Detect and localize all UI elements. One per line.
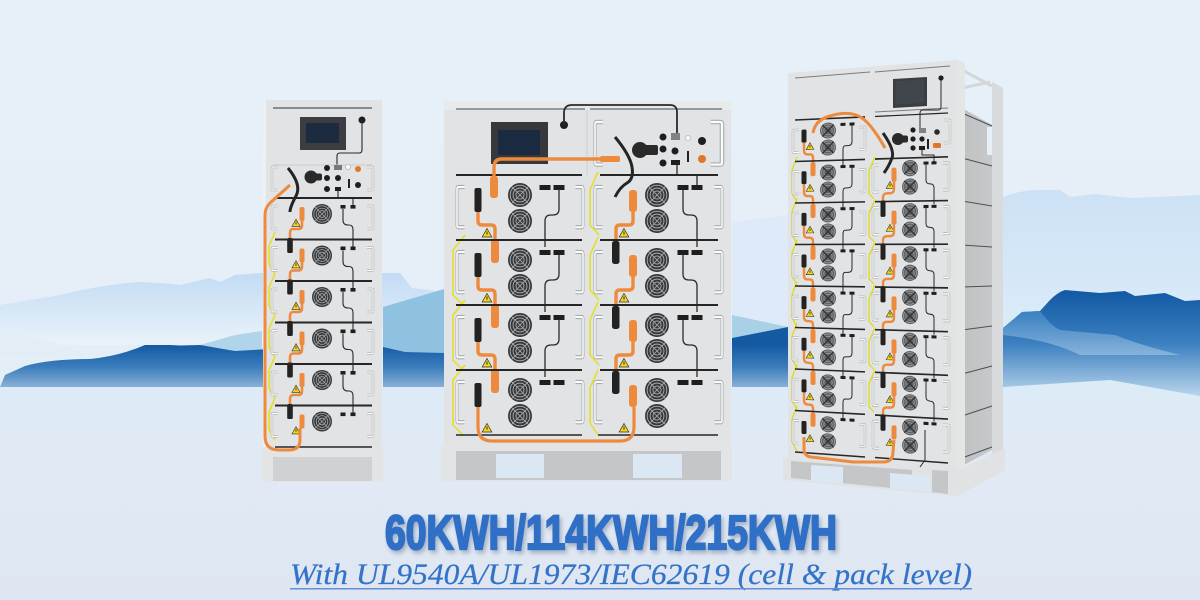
rack B battery modules, right column <box>590 172 722 435</box>
rack C side panels <box>957 60 1003 490</box>
subtitle with certifications: With UL9540A/UL1973/IEC62619 (cell & pack level) <box>290 558 972 591</box>
rack C rear wire <box>920 430 925 467</box>
rack C control module <box>875 113 950 173</box>
rack B top band <box>444 101 731 175</box>
background: distant hills <box>0 190 1200 395</box>
rack A control module <box>272 164 373 212</box>
rack B touch screen <box>491 122 548 164</box>
rack B battery modules, left column <box>453 175 583 435</box>
rack C: 215KWH cabinet <box>783 60 1005 496</box>
rack C base <box>783 448 1005 496</box>
rack C control wire <box>920 75 944 128</box>
rack A: 60KWH cabinet <box>262 100 383 482</box>
rack B: 114KWH cabinet <box>441 101 732 481</box>
rack C battery modules, right column <box>869 155 949 463</box>
rack B control wire <box>560 105 677 133</box>
title: 60KWH/114KWH/215KWH <box>385 507 837 560</box>
rack B base <box>441 435 732 481</box>
rack C top band <box>795 66 950 112</box>
rack A long orange cable <box>265 185 300 450</box>
rack A top band <box>273 107 372 109</box>
rack B control module <box>595 122 722 197</box>
background: light blue mid hills <box>200 289 788 355</box>
rack A control wire <box>337 116 366 166</box>
rack C front panel <box>788 60 957 470</box>
rack A battery modules <box>269 198 373 447</box>
rack C orange cables <box>804 113 894 462</box>
rack A base <box>262 447 383 482</box>
rack B orange cables <box>478 156 634 441</box>
rack C touch screen <box>893 77 927 108</box>
background: dark blue mountains <box>0 290 1200 396</box>
rack A touch screen <box>300 117 346 150</box>
rack C battery modules, left column <box>792 117 865 457</box>
